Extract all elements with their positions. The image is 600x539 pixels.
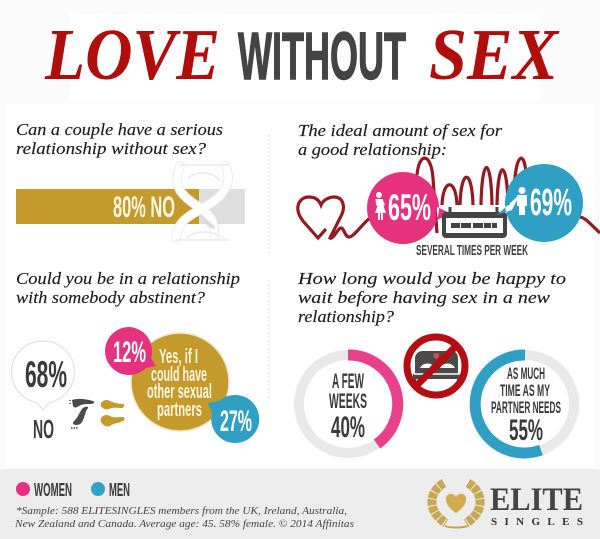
- icon: gold footprints: [101, 400, 124, 426]
- callout: yes with other partners: could have: [151, 364, 207, 386]
- callout: 68% no: NO: [33, 414, 54, 444]
- callout: women 12%: 12%: [113, 336, 146, 369]
- panel: how long to wait: [297, 269, 574, 453]
- callout: yes with other partners: [131, 333, 229, 431]
- callout: men 69%: [497, 164, 583, 242]
- legend: men: [91, 480, 130, 500]
- callout: women 65%: 65%: [388, 187, 431, 228]
- heading: how long question: How long would you be happy to: [297, 269, 566, 288]
- heading: abstinent question: with somebody abstinent?: [16, 288, 206, 307]
- title: LOVE: [44, 14, 220, 95]
- title: SEX: [429, 14, 560, 95]
- icon: laurel and heart: [432, 483, 480, 528]
- heading: ideal amount question: a good relationship:: [298, 140, 447, 159]
- heading: ideal amount question: [298, 121, 503, 159]
- ring chart: as much time 55%: 55%: [509, 414, 543, 447]
- heading: abstinent question: [16, 269, 240, 307]
- icon: intertwined knot: [176, 165, 229, 240]
- panel: ideal amount: [298, 121, 600, 259]
- logo: elite singles: ELITE: [490, 482, 583, 518]
- ring chart: as much time 55%: [475, 355, 574, 453]
- ring chart: as much time 55%: AS MUCH: [507, 364, 545, 383]
- heading: how long question: wait before having sex in a new: [298, 288, 550, 307]
- footnote: *Sample: 588 ELITESINGLES members from the UK, Ireland, Australia,: [16, 506, 347, 517]
- callout: 68% no: 68%: [25, 354, 67, 395]
- icon: dark footprints: [70, 399, 94, 428]
- ring chart: a few weeks 40%: A FEW: [332, 370, 364, 393]
- icon: no bed sign: [407, 337, 465, 395]
- panel: serious relationship: [16, 120, 245, 240]
- heading: serious relationship question: [16, 120, 223, 158]
- heading: how long question: relationship?: [298, 307, 395, 326]
- bar chart: 80% no: [16, 189, 245, 224]
- heading: how long question: [297, 269, 566, 326]
- callout: men 27%: 27%: [220, 405, 252, 438]
- callout: yes with other partners: Yes, if I: [159, 346, 198, 368]
- panel: abstinent: [12, 269, 259, 444]
- ring chart: as much time 55%: TIME AS MY: [500, 381, 550, 400]
- logo: elite singles: [432, 482, 583, 528]
- callout: yes with other partners: other sexual: [147, 381, 212, 403]
- title: [44, 14, 560, 95]
- logo: elite singles: SINGLES: [491, 516, 583, 528]
- heading: ideal amount question: The ideal amount of sex for: [298, 121, 503, 140]
- callout: 68% no: [12, 341, 74, 444]
- icon: woman: [375, 192, 386, 220]
- footnote: New Zealand and Canada. Average age: 45. 58% female. © 2014 Affinitas: [14, 519, 354, 530]
- callout: men 27%: [208, 395, 259, 443]
- heading: serious relationship question: Can a couple have a serious: [16, 120, 223, 139]
- device: alarm display: [442, 207, 507, 238]
- icon: man: [517, 187, 527, 215]
- footer: [0, 469, 600, 539]
- legend: women: [16, 480, 72, 500]
- heading: abstinent question: Could you be in a relationship: [16, 269, 240, 288]
- ring chart: a few weeks 40%: 40%: [331, 411, 365, 444]
- callout: women 65%: [367, 172, 452, 244]
- chart: heartbeat line: [298, 158, 600, 238]
- footnote: [14, 506, 354, 530]
- bar chart: 80% no: 80% NO: [113, 191, 175, 224]
- legend: men: MEN: [109, 480, 130, 500]
- callout: women 12%: [105, 327, 156, 375]
- ring chart: a few weeks 40%: [299, 355, 398, 453]
- legend: women: WOMEN: [34, 480, 72, 500]
- heading: serious relationship question: relationship without sex?: [16, 139, 207, 158]
- ring chart: a few weeks 40%: WEEKS: [329, 390, 367, 413]
- title: WITHOUT: [238, 19, 406, 94]
- callout: yes with other partners: partners: [157, 399, 202, 421]
